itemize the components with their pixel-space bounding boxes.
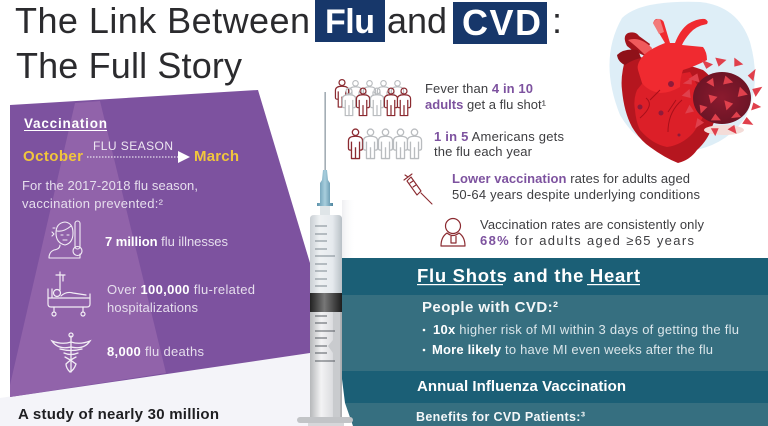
title highlight: CVD: CVD [462, 2, 541, 43]
plunger body [310, 312, 342, 418]
stat: hospitalizations: hospitalizations [107, 300, 198, 315]
barrel [310, 215, 342, 293]
text: flu shot rate: adults get a flu shot¹ [425, 97, 547, 112]
text: 1 in 5: 1 in 5 Americans gets [434, 129, 564, 144]
title highlight: Flu [315, 0, 385, 42]
text: 1 in 5 [434, 129, 564, 159]
text: flu shot rate: Fever than 4 in 10 [425, 81, 533, 96]
light blue circle [609, 2, 755, 152]
panel: flu shots and the heart [341, 258, 768, 426]
icon: hospital bed [48, 272, 90, 316]
stats list [335, 80, 704, 248]
people with CVD: 10x higher risk of MI within 3 days of getting the flu [433, 322, 739, 337]
title [15, 0, 562, 86]
needle [324, 92, 326, 172]
title: : [552, 0, 562, 41]
heart and virus illustration [609, 2, 762, 163]
flu season timeline: March [194, 148, 239, 165]
people with CVD: People with CVD:² [422, 299, 558, 316]
people with CVD [422, 299, 739, 357]
text: lower vaccination [452, 171, 700, 202]
stat: flu illnesses: 7 million flu illnesses [105, 234, 228, 249]
study text: A study of nearly 30 million [18, 406, 219, 423]
annual vaccination heading: Annual Influenza Vaccination [417, 378, 626, 395]
plunger seal [310, 293, 342, 312]
icon: virus [682, 58, 762, 136]
benefits heading: Benefits for CVD Patients:³ [416, 410, 585, 424]
vaccination heading: Vaccination [24, 116, 107, 131]
title: and [387, 0, 447, 41]
stat: flu deaths: 8,000 flu deaths [107, 344, 204, 359]
panel: vaccination [10, 90, 310, 397]
icon: sick person with thermometer [49, 221, 82, 258]
text: older adult rate: Vaccination rates are consistently only [480, 217, 704, 232]
icon: people, 4 in 10 [335, 80, 411, 116]
people with CVD: More likely to have MI even weeks after the flu [432, 342, 713, 357]
syringe [297, 92, 356, 426]
flu season timeline: October [23, 148, 83, 165]
vaccination intro text [22, 178, 198, 211]
vaccination intro text: For the 2017-2018 flu season, [22, 178, 198, 193]
hub [317, 170, 333, 206]
text: older adult rate [480, 217, 704, 248]
stat: hospitalizations [107, 282, 255, 315]
icon: small syringe [404, 174, 432, 204]
text: older adult rate: 68% for adults aged ≥65 years [480, 233, 694, 248]
icon: older adult [441, 218, 465, 246]
flu season timeline [23, 139, 239, 165]
stat: hospitalizations: Over 100,000 flu-related [107, 282, 255, 297]
text: flu shot rate [425, 81, 547, 112]
title: The Link Between [15, 0, 310, 41]
icon: people, 1 in 5 [348, 129, 422, 159]
text: lower vaccination: Lower vaccination rates for adults aged [452, 171, 690, 186]
title: The Full Story [16, 45, 242, 86]
icon: heart [617, 19, 718, 163]
finger flange [297, 417, 353, 423]
graduations [315, 226, 335, 286]
vaccination intro text: vaccination prevented:² [22, 196, 164, 211]
text: 1 in 5: the flu each year [434, 144, 533, 159]
text: lower vaccination: 50-64 years despite underlying conditions [452, 187, 700, 202]
icon: caduceus [52, 333, 90, 372]
panel heading: Flu Shots and the Heart [417, 265, 640, 286]
flu season timeline: FLU SEASON [93, 139, 173, 153]
title highlight: Flu: Flu [325, 3, 375, 41]
